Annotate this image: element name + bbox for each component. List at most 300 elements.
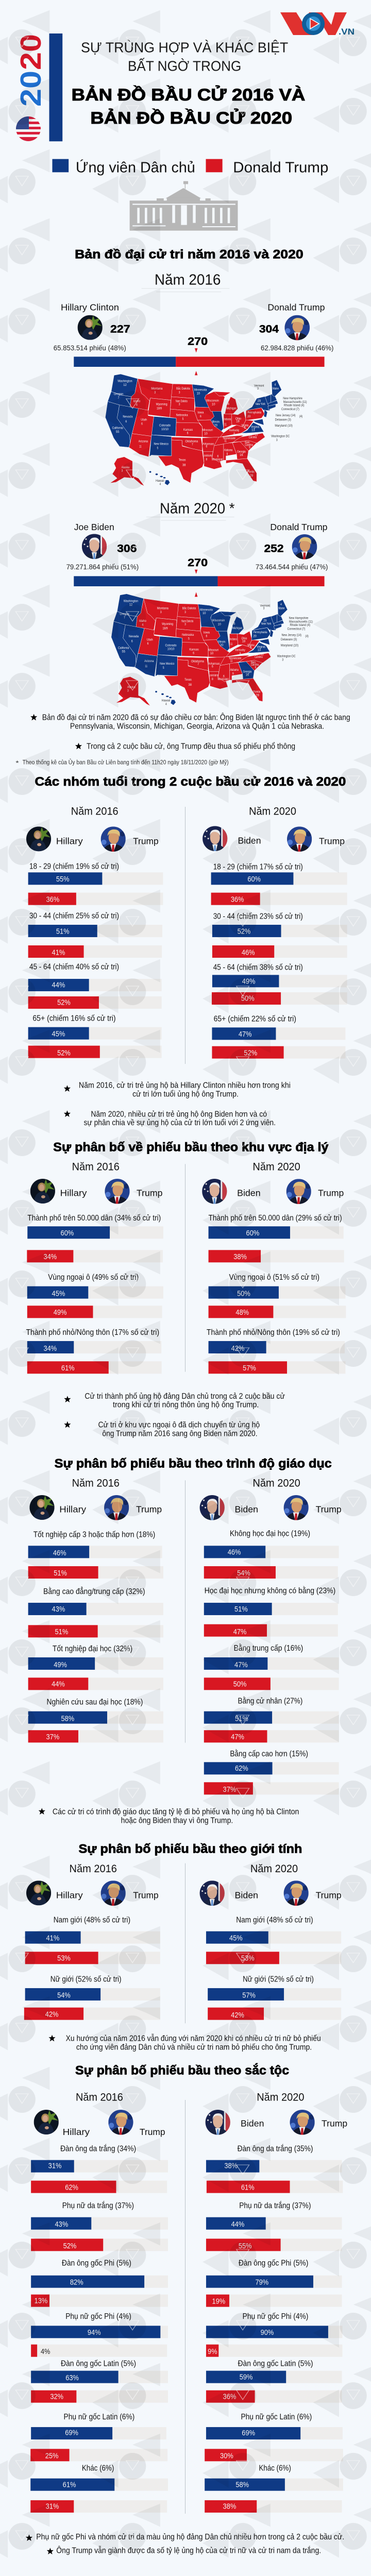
footnote xyxy=(15,758,229,767)
year 2016 with candidates xyxy=(26,1863,159,1906)
map: 2016 states xyxy=(105,374,281,486)
latino men: 59% xyxy=(240,2372,252,2381)
map labels 2020: 10 xyxy=(203,611,206,615)
women: Nữ giới (52% số cử tri) xyxy=(243,1975,314,1984)
women xyxy=(208,1975,341,2020)
candidate: Trump xyxy=(259,302,333,352)
men: Nam giới (48% số cử tri) xyxy=(236,1916,313,1924)
white men: 31% xyxy=(48,2161,61,2170)
year 2020 with candidates: Biden xyxy=(237,1188,261,1198)
bar chart: race 2020 xyxy=(205,2144,343,2513)
age 18-29: 36% xyxy=(231,895,244,904)
map labels 2016: 3 xyxy=(257,386,259,391)
map labels 2016: Washington DC xyxy=(271,434,290,438)
bar chart: education 2020 xyxy=(204,1529,339,1794)
map labels 2016: Missouri xyxy=(203,428,213,432)
map labels 2016: 4 xyxy=(136,403,138,406)
map labels 2016: Washington xyxy=(117,379,132,383)
map labels 2020: Nebraska xyxy=(182,633,194,637)
latino women: Phụ nữ gốc Latin (6%) xyxy=(64,2412,134,2421)
map labels 2020: (4) xyxy=(305,634,309,638)
map labels 2020: Nam xyxy=(251,660,256,664)
panel: age notes xyxy=(26,1081,346,1374)
map labels 2016: 6 xyxy=(217,454,219,458)
note 2: Cử tri ở khu vực ngoại ô đã dịch chuyển từ ủng hộ xyxy=(98,1420,260,1429)
latino men: 63% xyxy=(65,2374,79,2382)
year 2020 with candidates xyxy=(200,1477,342,1520)
map labels 2016: Nebraska xyxy=(176,413,188,417)
map labels 2016 xyxy=(112,379,307,486)
black men: 13% xyxy=(35,2296,47,2305)
map labels 2016: 10 xyxy=(212,402,215,406)
bar chart: geography 2020 xyxy=(207,1213,346,1374)
map labels 2020: Iowa xyxy=(204,631,210,634)
white men: 38% xyxy=(224,2161,238,2170)
map labels 2016: New Hampshire xyxy=(283,396,302,400)
map labels 2016: California xyxy=(112,426,123,430)
map labels 2016: Ohio xyxy=(235,417,241,420)
panel: race xyxy=(26,2063,347,2555)
women: 54% xyxy=(57,1991,71,1999)
map labels 2016: 10 xyxy=(197,392,200,395)
age 18-29: 55% xyxy=(56,875,70,883)
map labels 2016: 11 xyxy=(224,439,227,443)
map labels 2020: Washington DC xyxy=(277,654,296,658)
age 45-64: 45 - 64 (chiếm 38% số cử tri) xyxy=(213,962,303,972)
map labels 2016: Louisiana xyxy=(203,453,213,457)
candidate: Trump xyxy=(256,521,328,571)
map labels 2020: 4 xyxy=(142,623,144,626)
title main: BẢN ĐỒ BẦU CỬ 2016 VÀ xyxy=(72,86,305,104)
map labels 2020: 11 xyxy=(145,664,147,668)
map labels 2016: 9 xyxy=(226,452,228,456)
map labels 2016: 7 xyxy=(118,396,120,400)
map labels 2016: Mississippi xyxy=(212,457,223,461)
map labels 2020: Oregon xyxy=(120,612,129,616)
map labels 2020: Arkansas xyxy=(209,662,220,666)
year heading 2016: Năm 2016 xyxy=(155,272,221,288)
college: 51% xyxy=(55,1628,68,1636)
year 2020 with candidates: Năm 2020 xyxy=(252,1477,300,1489)
map labels 2016: 3 xyxy=(179,402,180,406)
legend xyxy=(52,159,328,176)
map labels 2016: Minnesota xyxy=(194,388,207,392)
map labels 2016: 16 xyxy=(226,402,229,406)
age 30-44: 41% xyxy=(52,948,65,957)
bar chart: gender 2016 xyxy=(24,1916,160,2020)
men xyxy=(25,1916,160,1964)
map labels 2020: 13 xyxy=(258,648,261,652)
map labels 2020: Carolina xyxy=(251,663,259,667)
city: 60% xyxy=(246,1229,259,1237)
suburb: Vùng ngoại ô (49% số cử tri) xyxy=(48,1273,139,1281)
note 2: Năm 2020, nhiều cử tri trẻ ủng hộ ông Biden hơn và có xyxy=(91,1109,267,1118)
age 30-44: 30 - 44 (chiếm 25% số cử tri) xyxy=(29,911,119,920)
map labels 2020: Michigan xyxy=(232,626,242,630)
year 2020 with candidates: Năm 2020 xyxy=(257,2091,305,2104)
age 45-64 xyxy=(28,962,162,1009)
map labels 2020: California xyxy=(118,646,129,650)
year 2016 with candidates xyxy=(30,1161,162,1204)
white men: 62% xyxy=(65,2183,78,2192)
map labels 2016: 18 xyxy=(236,419,240,423)
map labels 2016: 6 xyxy=(206,445,208,448)
map labels 2016: 4 xyxy=(160,482,161,486)
latino women: 25% xyxy=(45,2451,58,2460)
map labels 2020: 18 xyxy=(242,639,246,643)
women: 42% xyxy=(231,2011,244,2019)
black women: Phụ nữ gốc Phi (4%) xyxy=(243,2312,308,2320)
age 65+: 52% xyxy=(244,1048,257,1057)
women: 42% xyxy=(45,2010,58,2019)
year 2020 with candidates xyxy=(206,2091,347,2135)
white women: 44% xyxy=(231,2220,244,2228)
map labels 2016: Colorado xyxy=(159,423,171,427)
map labels 2020: Missouri xyxy=(208,648,218,652)
map labels 2020: Illinois xyxy=(218,640,226,643)
map labels 2020: 29 xyxy=(263,619,267,622)
map labels 2016: Bắc xyxy=(249,433,252,436)
year 2020 with candidates: Biden xyxy=(238,835,261,845)
map labels 2016: Oregon xyxy=(114,392,123,396)
women: 57% xyxy=(242,1991,256,1999)
icon: US flag xyxy=(16,116,41,141)
map labels 2016: Kentucky xyxy=(229,428,239,432)
suburb: 49% xyxy=(54,1308,66,1316)
map labels 2020: Bắc xyxy=(255,652,258,656)
age 18-29 xyxy=(28,862,163,905)
map labels 2020: 18/9 xyxy=(162,626,168,630)
bachelor xyxy=(204,1697,339,1742)
some college: 51% xyxy=(234,1605,248,1613)
candidate: Biden xyxy=(66,521,139,571)
postgraduate: Nghiên cứu sau đại học (18%) xyxy=(46,1697,143,1706)
map labels 2016: Oklahoma xyxy=(185,439,198,443)
associate: Bằng trung cấp (16%) xyxy=(234,1643,303,1652)
note 1 xyxy=(64,1081,291,1098)
white women: 43% xyxy=(55,2220,68,2228)
note 1 xyxy=(30,713,350,731)
map labels 2020: 20 xyxy=(253,634,257,638)
map labels 2020: 3 xyxy=(184,610,186,614)
map labels 2020: New Hampshire xyxy=(289,616,309,620)
suburb: 50% xyxy=(237,1289,250,1298)
some college xyxy=(204,1586,338,1637)
divider xyxy=(184,1480,186,1743)
threshold 270: 270 xyxy=(188,335,208,347)
rural: Thành phố nhỏ/Nông thôn (17% số cử tri) xyxy=(26,1328,159,1336)
map labels 2016: 3 xyxy=(179,391,180,394)
map labels 2020: Georgia xyxy=(243,670,251,673)
map labels 2020: 20 xyxy=(220,643,224,647)
year 2020 with candidates: Biden xyxy=(235,1504,258,1515)
map labels 2020 xyxy=(118,599,313,706)
map labels 2020: Maryland (10) xyxy=(281,643,299,647)
latino women: 69% xyxy=(65,2428,78,2437)
black women: 90% xyxy=(261,2328,274,2336)
map labels 2016: 10 xyxy=(204,432,208,435)
map labels 2020: Connecticut (7) xyxy=(287,627,306,631)
map labels 2016: 9 xyxy=(249,446,250,449)
map labels 2020: 8 xyxy=(240,652,241,655)
year 2020 with candidates xyxy=(200,1863,342,1906)
map labels 2020: 5 xyxy=(188,637,190,640)
map labels 2016: 16 xyxy=(240,453,243,457)
age 18-29: 36% xyxy=(46,895,59,904)
year 2016 with candidates xyxy=(26,805,159,852)
map labels 2020: 5 xyxy=(250,646,251,649)
college: 43% xyxy=(52,1605,65,1613)
year 2020 with candidates: Năm 2020 xyxy=(250,1863,298,1875)
map labels 2020: Carolina xyxy=(255,655,263,659)
map labels 2016: Utah xyxy=(141,418,147,421)
note 1 xyxy=(64,1392,285,1409)
map labels 2020: Virginia xyxy=(257,645,265,649)
map labels 2016: Alaska xyxy=(122,465,130,469)
age 18-29: 18 - 29 (chiếm 19% số cử tri) xyxy=(29,862,119,871)
city: Thành phố trên 50.000 dân (34% số cử tri) xyxy=(27,1213,161,1222)
city: 34% xyxy=(43,1252,57,1261)
map labels 2016: Virginia xyxy=(241,423,248,427)
age 45-64: 45 - 64 (chiếm 40% số cử tri) xyxy=(29,962,119,971)
map labels 2016: Nevada xyxy=(123,415,133,418)
city: 60% xyxy=(61,1229,74,1237)
age 30-44: 51% xyxy=(56,927,70,936)
map labels 2020: Wisconsin xyxy=(212,618,225,622)
rural: 57% xyxy=(243,1364,256,1372)
age 45-64: 49% xyxy=(242,977,255,986)
year 2016 with candidates: Trump xyxy=(140,2126,165,2137)
map labels 2016: 10/10 xyxy=(161,427,168,431)
map labels 2020: 3 xyxy=(184,622,186,626)
year 2016 with candidates: Hillary xyxy=(63,2126,90,2137)
map labels 2016: 11 xyxy=(224,422,227,426)
candidate: Clinton xyxy=(54,302,130,352)
map: 2020 states xyxy=(111,594,313,706)
high school: 51% xyxy=(54,1569,67,1577)
map labels 2020: 3 xyxy=(282,658,283,662)
map labels 2016: 6 xyxy=(125,419,127,423)
note 1: cử tri lớn tuổi ủng hộ ông Trump. xyxy=(132,1089,239,1098)
map labels 2020: Bắc Dakota xyxy=(182,606,196,610)
men: 45% xyxy=(229,1934,243,1942)
map labels 2016: Massachusetts (11) xyxy=(283,400,307,404)
map labels 2020: Alabama xyxy=(230,668,239,672)
latino men: 32% xyxy=(50,2392,63,2401)
age 30-44: 52% xyxy=(238,927,250,936)
legend: Ứng viên Dân chủ xyxy=(76,159,195,176)
year heading 2020: Năm 2020 * xyxy=(160,500,235,517)
latino women: Phụ nữ gốc Latin (6%) xyxy=(241,2412,312,2421)
map labels 2020: 7 xyxy=(197,662,199,666)
map labels 2020: 6 xyxy=(147,641,149,646)
candidate: Clinton: 65.853.514 phiếu (48%) xyxy=(54,344,126,352)
note: hoặc ông Biden thay vì ông Trump. xyxy=(121,1816,233,1825)
rural xyxy=(207,1328,345,1374)
rural: 42% xyxy=(231,1344,244,1352)
white women: Phụ nữ da trắng (37%) xyxy=(239,2201,311,2210)
map labels 2020: 6 xyxy=(212,665,213,668)
map labels 2016: Virginia xyxy=(251,425,260,429)
year 2020 with candidates xyxy=(203,805,345,852)
postgraduate: Bằng cấp cao hơn (15%) xyxy=(230,1749,308,1758)
year 2016 with candidates: Trump xyxy=(133,1890,159,1900)
men: 41% xyxy=(46,1934,59,1942)
white men: Đàn ông da trắng (34%) xyxy=(60,2144,136,2153)
university: 44% xyxy=(52,1680,65,1688)
map labels 2020: Massachusetts (11) xyxy=(289,620,313,623)
year 2016 with candidates xyxy=(34,2091,165,2137)
high school xyxy=(28,1530,163,1579)
map labels 2020: Oklahoma xyxy=(191,659,204,663)
black men: 19% xyxy=(212,2297,225,2306)
map labels 2016: Maine xyxy=(273,386,279,391)
threshold 270 xyxy=(188,335,208,375)
age 45-64: 44% xyxy=(52,980,65,989)
suburb: 48% xyxy=(235,1308,249,1316)
icon: VOV logo xyxy=(280,12,355,37)
title intro xyxy=(81,40,288,74)
latino men: Đàn ông gốc Latin (5%) xyxy=(238,2359,313,2368)
age 45-64: 52% xyxy=(57,998,71,1007)
panel: map notes xyxy=(15,713,350,852)
suburb: 45% xyxy=(52,1289,65,1298)
no college: 54% xyxy=(237,1569,250,1577)
map labels 2020: 3 xyxy=(127,689,129,692)
other: 61% xyxy=(63,2480,76,2489)
map labels 2016: Alabama xyxy=(224,448,233,452)
latino women xyxy=(30,2412,167,2461)
map labels 2016: 3 xyxy=(276,438,278,442)
note xyxy=(39,1807,299,1825)
postgraduate: 37% xyxy=(46,1733,59,1741)
bar chart: gender 2020 xyxy=(206,1916,341,2020)
black women: Phụ nữ gốc Phi (4%) xyxy=(65,2312,131,2320)
map labels 2020: Kansas xyxy=(189,648,199,651)
age 65+: 52% xyxy=(57,1048,71,1057)
map labels 2016: Delaware (3) xyxy=(275,418,291,421)
candidate: Biden: 79.271.864 phiếu (51%) xyxy=(66,563,139,571)
map labels 2020: 6 xyxy=(193,651,194,655)
panel: geography notes and education header xyxy=(29,1392,342,1520)
title intro: BẤT NGỜ TRONG xyxy=(128,58,241,74)
university: Tốt nghiệp đại học (32%) xyxy=(53,1644,132,1653)
postgraduate xyxy=(28,1697,163,1742)
note 2 xyxy=(64,1109,276,1127)
candidate: Trump: Donald Trump xyxy=(270,521,328,532)
other: Khác (6%) xyxy=(82,2463,114,2472)
panel: 2016 electoral map xyxy=(54,248,333,486)
map labels 2016: 6 xyxy=(187,431,189,435)
map labels 2020: 11 xyxy=(230,659,233,663)
map labels 2016: Michigan xyxy=(226,406,237,410)
associate: 47% xyxy=(234,1660,248,1669)
map labels 2016: 6 xyxy=(200,414,201,418)
divider xyxy=(184,807,186,1064)
map labels 2016: 4 xyxy=(275,383,276,386)
map labels 2016: Texas xyxy=(179,458,185,462)
map labels 2020: 10/10 xyxy=(167,647,175,651)
white men xyxy=(206,2144,343,2193)
map labels 2016: Tennessee xyxy=(223,436,235,440)
candidate: Trump: 304 xyxy=(259,323,279,335)
year 2016 with candidates: Năm 2016 xyxy=(71,805,119,818)
year 2016 with candidates: Trump xyxy=(133,836,159,846)
latino men: 36% xyxy=(223,2392,236,2401)
black men: 79% xyxy=(255,2278,268,2286)
map labels 2016: 8 xyxy=(206,457,208,461)
heading: gender: Sự phân bố phiếu bầu theo giới tính xyxy=(78,1842,302,1856)
year 2020 with candidates: Trump xyxy=(316,1504,342,1515)
map labels 2016: 6 xyxy=(141,422,143,426)
white men: Đàn ông da trắng (35%) xyxy=(238,2144,313,2153)
bachelor: Bằng cử nhân (27%) xyxy=(238,1697,302,1705)
map labels 2020: Tennessee xyxy=(229,656,242,660)
map labels 2020: Kentucky xyxy=(235,648,245,652)
map labels 2020: Arizona xyxy=(144,659,154,663)
university: 49% xyxy=(54,1660,67,1669)
map labels 2020: Indiana xyxy=(230,637,237,641)
map labels 2016: Indiana xyxy=(224,417,231,421)
map labels 2020: Idaho xyxy=(139,619,146,623)
latino women: 69% xyxy=(242,2429,255,2437)
age 30-44 xyxy=(212,911,347,958)
rural xyxy=(26,1328,162,1374)
map labels 2020: New Mexico xyxy=(160,662,175,666)
heading: electoral map: Bản đồ đại cử tri năm 2016 và 2020 xyxy=(75,248,303,261)
map labels 2016: Hawaii xyxy=(156,479,164,483)
white men xyxy=(31,2144,168,2193)
candidate: Trump: 62.984.828 phiếu (46%) xyxy=(261,344,333,352)
map labels 2020: Montana xyxy=(157,606,168,610)
map labels 2020: 9 xyxy=(255,666,257,669)
year 2016 with candidates: Năm 2016 xyxy=(70,1863,117,1875)
map labels 2020: Wyoming xyxy=(162,622,173,626)
rural: 61% xyxy=(61,1364,75,1372)
map labels 2020: Alaska xyxy=(127,685,136,689)
map labels 2016: Arizona xyxy=(139,439,148,443)
map labels 2016: 3 xyxy=(122,469,123,472)
map labels 2020: 6 xyxy=(223,674,225,678)
postgraduate xyxy=(204,1749,339,1794)
map labels 2020: 4 xyxy=(280,602,282,606)
map labels 2016: 12 xyxy=(123,383,127,387)
map labels 2020: Vermont xyxy=(260,604,270,607)
footnote: Theo thống kê của Ủy ban Bầu cử Liên bang tính đến 11h20 ngày 18/11/2020 (giờ Mỹ) xyxy=(23,758,229,766)
map labels 2016: 5 xyxy=(157,446,159,450)
year 2020 with candidates: Trump xyxy=(316,1890,342,1900)
map labels 2020: 10 xyxy=(217,622,221,626)
year 2016 with candidates: Hillary xyxy=(59,1504,86,1515)
white women: Phụ nữ da trắng (37%) xyxy=(62,2201,134,2210)
no college: Không học đại học (19%) xyxy=(230,1529,310,1538)
no college xyxy=(204,1529,339,1579)
electoral bar xyxy=(74,576,325,586)
title main: BẢN ĐỒ BẦU CỬ 2020 xyxy=(90,109,292,127)
map labels 2020: 6 xyxy=(206,634,208,638)
age 18-29: 18 - 29 (chiếm 17% số cử tri) xyxy=(213,862,303,871)
black men xyxy=(31,2259,168,2307)
men xyxy=(206,1916,341,1964)
city xyxy=(209,1213,344,1262)
map labels 2016: New Mexico xyxy=(154,442,168,446)
divider xyxy=(184,1863,186,2023)
map labels 2016: Arkansas xyxy=(203,442,214,446)
bar chart: age 2016 xyxy=(28,862,163,1058)
black men: Đàn ông gốc Phi (5%) xyxy=(62,2258,131,2267)
map labels 2016: (4) xyxy=(299,414,303,418)
other xyxy=(30,2463,168,2513)
